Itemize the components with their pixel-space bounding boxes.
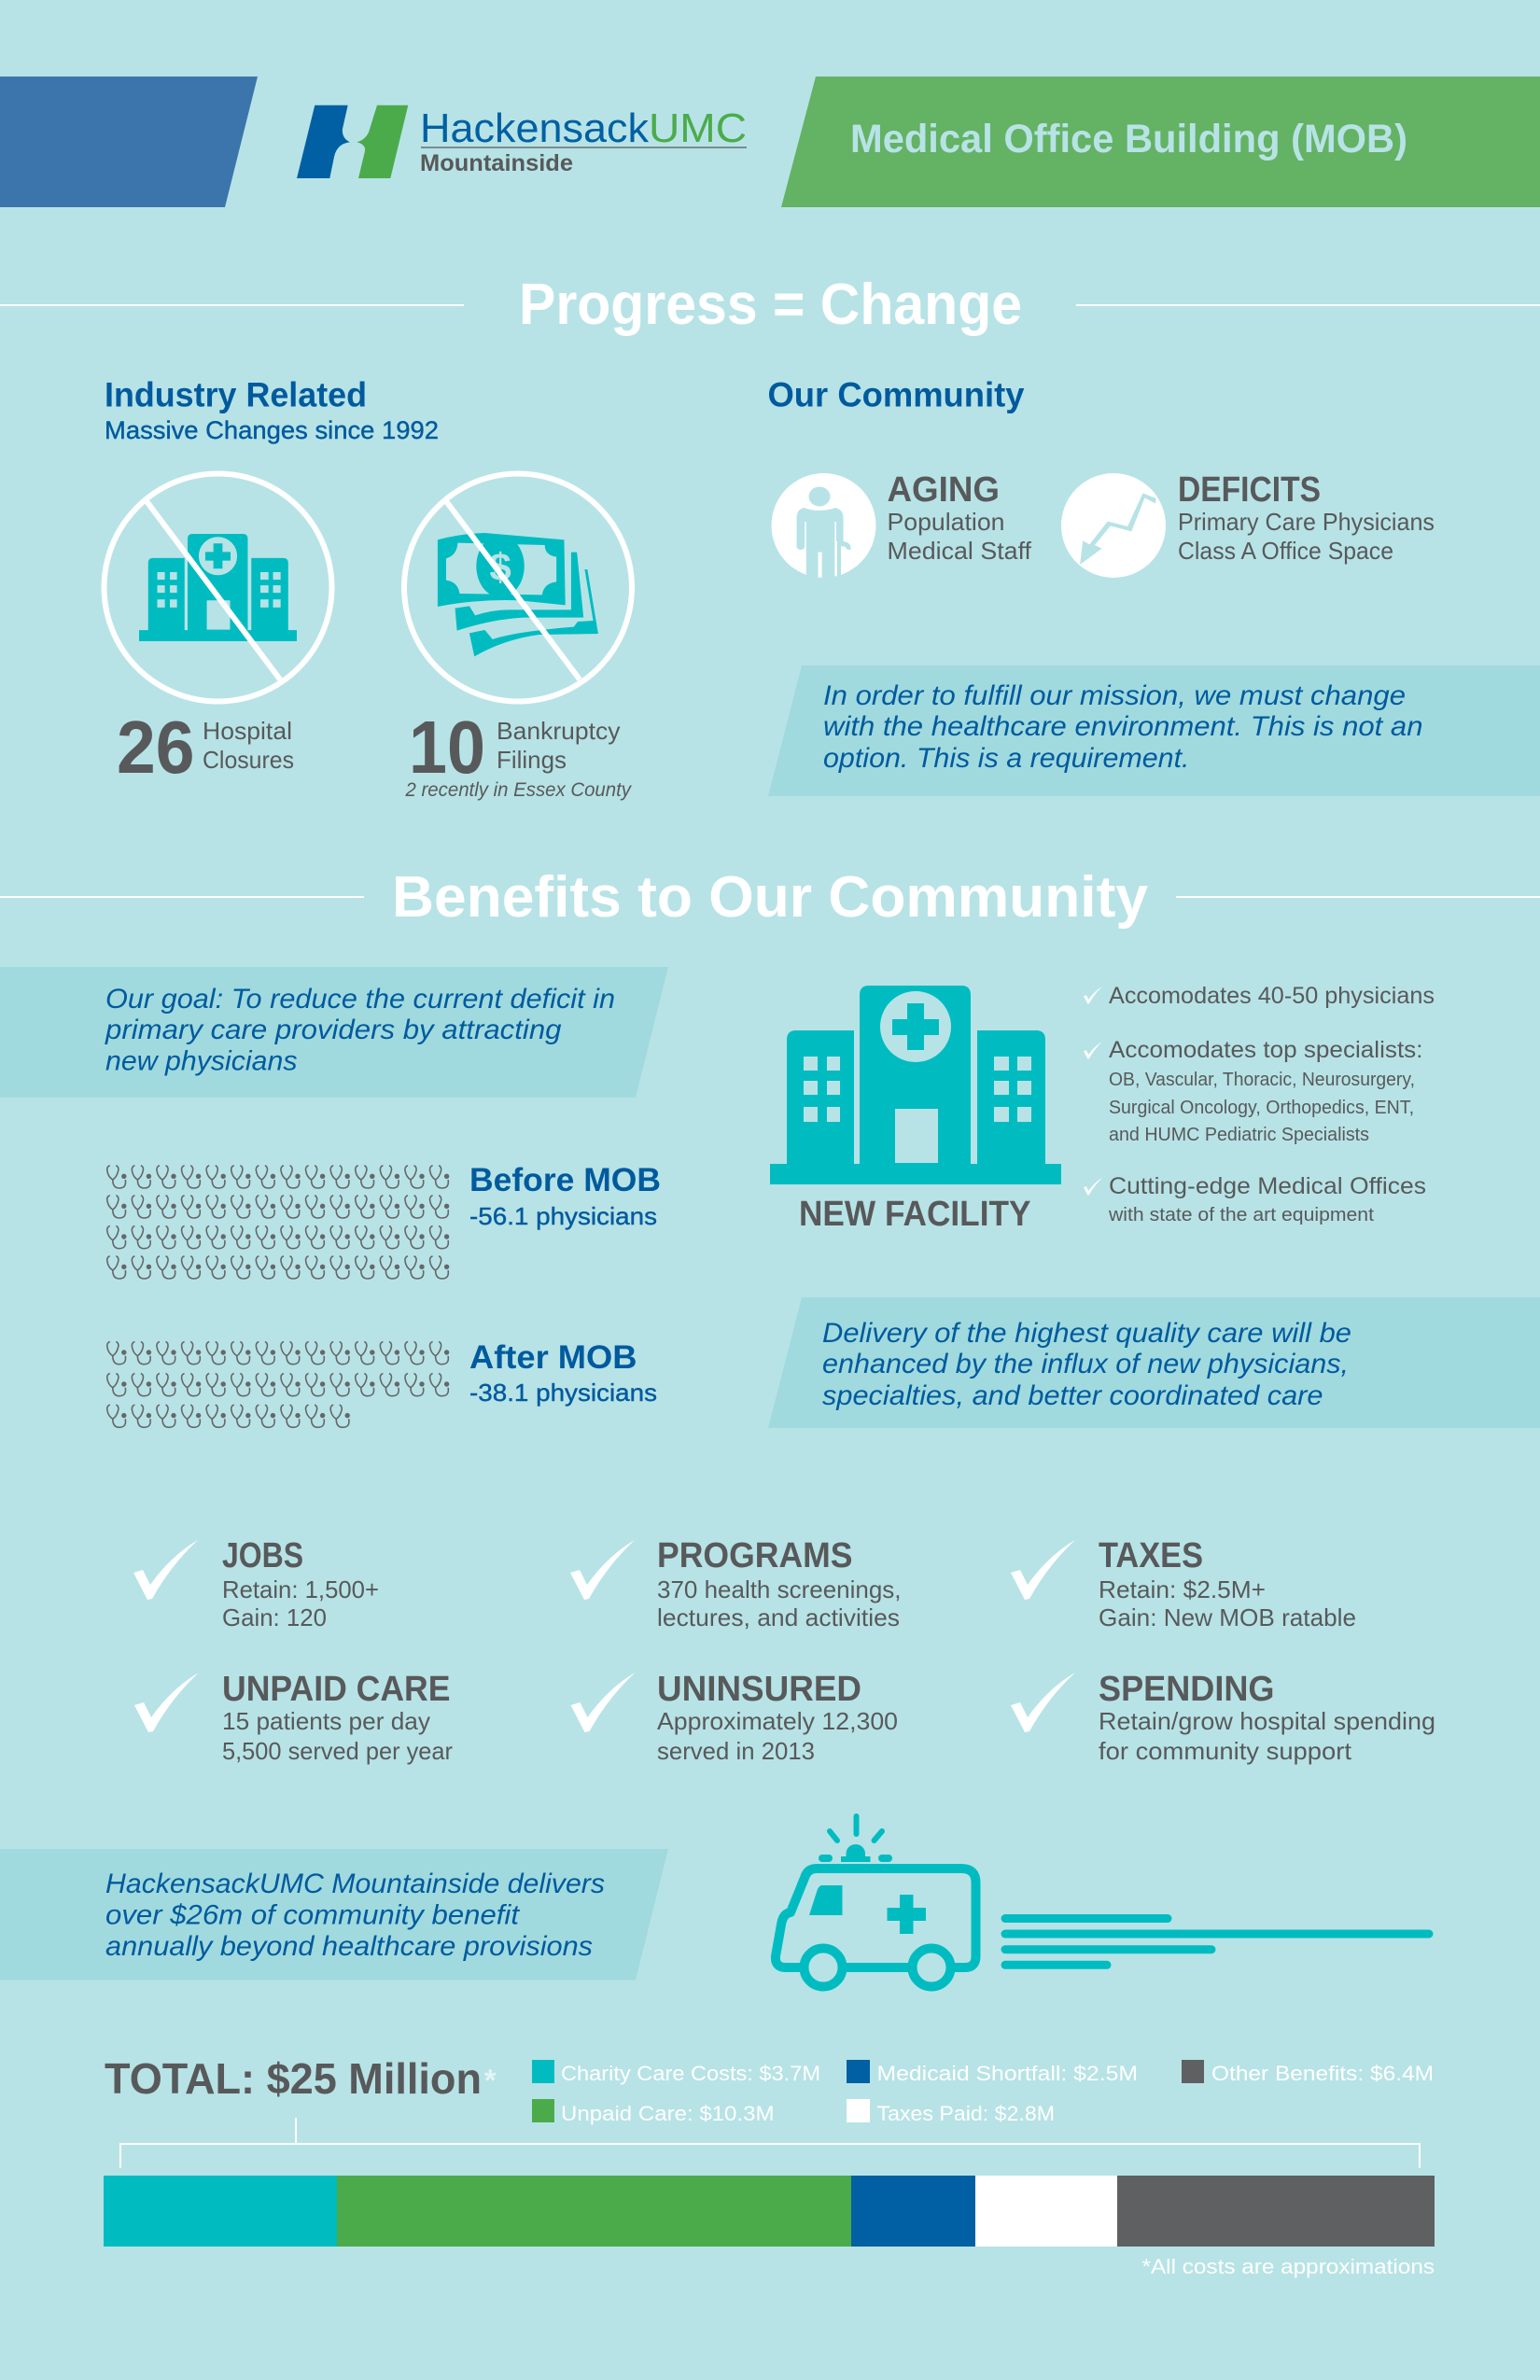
item: spending bbox=[1011, 1670, 1435, 1765]
stat: 26 hospital closures: 26 bbox=[117, 706, 194, 789]
callout: delivery of care: Delivery of the highest quality care will be bbox=[822, 1318, 1351, 1349]
item: jobs bbox=[133, 1536, 379, 1631]
header bbox=[0, 77, 1540, 207]
list: facility features: Surgical Oncology, Orthopedics, ENT, bbox=[1109, 1098, 1414, 1118]
callout: delivery of care: specialties, and better coordinated care bbox=[822, 1380, 1323, 1411]
callout: community benefit: annually beyond healthcare provisions bbox=[105, 1931, 593, 1962]
callout: mission: In order to fulfill our mission, we must change bbox=[823, 680, 1406, 711]
text: deficits bbox=[1178, 470, 1435, 565]
panel: new facility bbox=[770, 983, 1435, 1234]
callout: community benefit: over $26m of community benefit bbox=[105, 1900, 521, 1930]
text: deficits: Primary Care Physicians bbox=[1178, 508, 1435, 536]
green title band: Medical Office Building (MOB) bbox=[850, 117, 1407, 161]
item: programs: PROGRAMS bbox=[657, 1536, 853, 1575]
item: taxes: TAXES bbox=[1099, 1536, 1203, 1575]
text: deficits: Class A Office Space bbox=[1178, 537, 1393, 565]
stat: 10 bankruptcy filings bbox=[405, 706, 632, 801]
item: uninsured: Approximately 12,300 bbox=[657, 1707, 898, 1735]
text: aging: Population bbox=[887, 508, 1004, 536]
legend bbox=[532, 2060, 1434, 2125]
item: unpaid care: 5,500 served per year bbox=[222, 1737, 453, 1765]
heading: total $25 million: * bbox=[484, 2064, 497, 2097]
item: jobs: Gain: 120 bbox=[222, 1603, 327, 1631]
text: aging: Medical Staff bbox=[887, 537, 1032, 565]
list: facility features: Cutting-edge Medical Offices bbox=[1109, 1173, 1426, 1199]
list: facility features: Accomodates top specialists: bbox=[1109, 1037, 1422, 1063]
item: spending: SPENDING bbox=[1099, 1670, 1275, 1709]
logo: HackensackUMC Mountainside: UMC bbox=[649, 105, 747, 151]
blue header band bbox=[0, 77, 258, 207]
stat: 10 bankruptcy filings: Filings bbox=[497, 746, 567, 774]
chart: after MOB physicians: -38.1 physicians bbox=[469, 1379, 657, 1407]
stat: 26 hospital closures: Hospital bbox=[203, 717, 292, 745]
heading: Progress = Change: Progress = Change bbox=[519, 273, 1022, 337]
green title band bbox=[781, 77, 1540, 207]
item: jobs: Retain: 1,500+ bbox=[222, 1575, 379, 1603]
icon: no money bbox=[404, 474, 632, 702]
logo: HackensackUMC Mountainside: Mountainside bbox=[420, 150, 573, 176]
text: aging bbox=[887, 470, 1032, 565]
chart: after MOB physicians bbox=[107, 1339, 657, 1427]
icon: no hospital bbox=[105, 474, 332, 702]
item: unpaid care bbox=[134, 1670, 453, 1765]
heading: Our Community: Our Community bbox=[767, 375, 1025, 414]
legend: Taxes Paid: $2.8M bbox=[877, 2102, 1055, 2125]
stat: 10 bankruptcy filings: 2 recently in Essex County bbox=[405, 779, 632, 801]
legend: Other Benefits: $6.4M bbox=[1211, 2062, 1434, 2085]
heading: Benefits to Our Community: Benefits to Our Community bbox=[392, 865, 1149, 930]
stat: 26 hospital closures bbox=[117, 706, 294, 789]
item: spending: Retain/grow hospital spending bbox=[1099, 1707, 1435, 1735]
icon: no money: $ bbox=[489, 545, 511, 589]
chart: before MOB physicians: Before MOB bbox=[469, 1162, 661, 1198]
item: taxes bbox=[1011, 1536, 1356, 1631]
panel: our community bbox=[767, 375, 1540, 796]
callout: community benefit: HackensackUMC Mountainside delivers bbox=[105, 1869, 605, 1899]
logo: HackensackUMC Mountainside: Hackensack bbox=[420, 105, 650, 151]
item: uninsured: served in 2013 bbox=[657, 1737, 815, 1765]
item: programs: lectures, and activities bbox=[657, 1603, 900, 1631]
item: spending: for community support bbox=[1099, 1737, 1352, 1765]
list: facility features: OB, Vascular, Thoracic, Neurosurgery, bbox=[1109, 1070, 1415, 1090]
text: aging: AGING bbox=[887, 470, 1000, 510]
item: taxes: Retain: $2.5M+ bbox=[1099, 1575, 1266, 1603]
callout: our goal: Our goal: To reduce the current deficit in bbox=[105, 984, 615, 1015]
item: unpaid care: 15 patients per day bbox=[222, 1707, 430, 1735]
icon: falling arrow bbox=[1061, 473, 1166, 578]
footnote: *All costs are approximations bbox=[1142, 2255, 1435, 2278]
stacked bar chart bbox=[104, 2176, 1435, 2247]
list: facility features: Accomodates 40-50 physicians bbox=[1109, 983, 1435, 1009]
chart: before MOB physicians bbox=[107, 1162, 661, 1279]
callout: delivery of care: enhanced by the influx of new physicians, bbox=[822, 1349, 1349, 1379]
bracket bbox=[120, 2118, 1420, 2168]
item: uninsured bbox=[571, 1670, 898, 1765]
item: programs bbox=[570, 1536, 902, 1631]
list: facility features: and HUMC Pediatric Specialists bbox=[1109, 1125, 1369, 1145]
list: facility features: with state of the art equipment bbox=[1108, 1205, 1374, 1225]
panel: industry related bbox=[105, 375, 632, 801]
callout: mission: with the healthcare environment. This is not an bbox=[823, 711, 1422, 742]
logo: HackensackUMC Mountainside bbox=[297, 105, 747, 178]
label: new facility: NEW FACILITY bbox=[799, 1195, 1030, 1234]
stat: 10 bankruptcy filings: 10 bbox=[409, 706, 485, 789]
stat: 26 hospital closures: Closures bbox=[203, 746, 294, 774]
item: taxes: Gain: New MOB ratable bbox=[1099, 1603, 1356, 1631]
text: deficits: DEFICITS bbox=[1178, 470, 1321, 510]
item: unpaid care: UNPAID CARE bbox=[222, 1670, 450, 1709]
callout: community benefit bbox=[0, 1849, 668, 1981]
item: programs: 370 health screenings, bbox=[657, 1575, 902, 1603]
legend: Charity Care Costs: $3.7M bbox=[561, 2062, 820, 2085]
stat: 10 bankruptcy filings: Bankruptcy bbox=[497, 717, 620, 745]
legend: Medicaid Shortfall: $2.5M bbox=[877, 2062, 1138, 2085]
chart: before MOB physicians: -56.1 physicians bbox=[469, 1202, 657, 1230]
callout: our goal: primary care providers by attracting bbox=[105, 1015, 562, 1045]
heading: Industry Related: Massive Changes since 1992 bbox=[105, 416, 439, 444]
callout: mission bbox=[768, 665, 1540, 796]
callout: mission: option. This is a requirement. bbox=[823, 743, 1189, 774]
chart: after MOB physicians: After MOB bbox=[469, 1339, 637, 1376]
callout: our goal bbox=[0, 967, 668, 1098]
icon: hospital bbox=[770, 986, 1061, 1184]
callout: delivery of care bbox=[768, 1297, 1540, 1428]
callout: our goal: new physicians bbox=[105, 1045, 297, 1077]
list: facility features bbox=[1084, 983, 1435, 1225]
speed lines bbox=[1005, 1919, 1429, 1965]
heading: total $25 million: TOTAL: $25 Million bbox=[105, 2054, 482, 2103]
panel: community benefits grid bbox=[133, 1536, 1435, 1765]
icon: ambulance bbox=[776, 1816, 1429, 1986]
item: uninsured: UNINSURED bbox=[657, 1670, 861, 1709]
legend: Unpaid Care: $10.3M bbox=[561, 2102, 775, 2125]
icon: aging person bbox=[771, 473, 875, 579]
item: jobs: JOBS bbox=[222, 1536, 303, 1575]
heading: Industry Related bbox=[105, 375, 439, 444]
heading: Industry Related: Industry Related bbox=[105, 375, 367, 414]
